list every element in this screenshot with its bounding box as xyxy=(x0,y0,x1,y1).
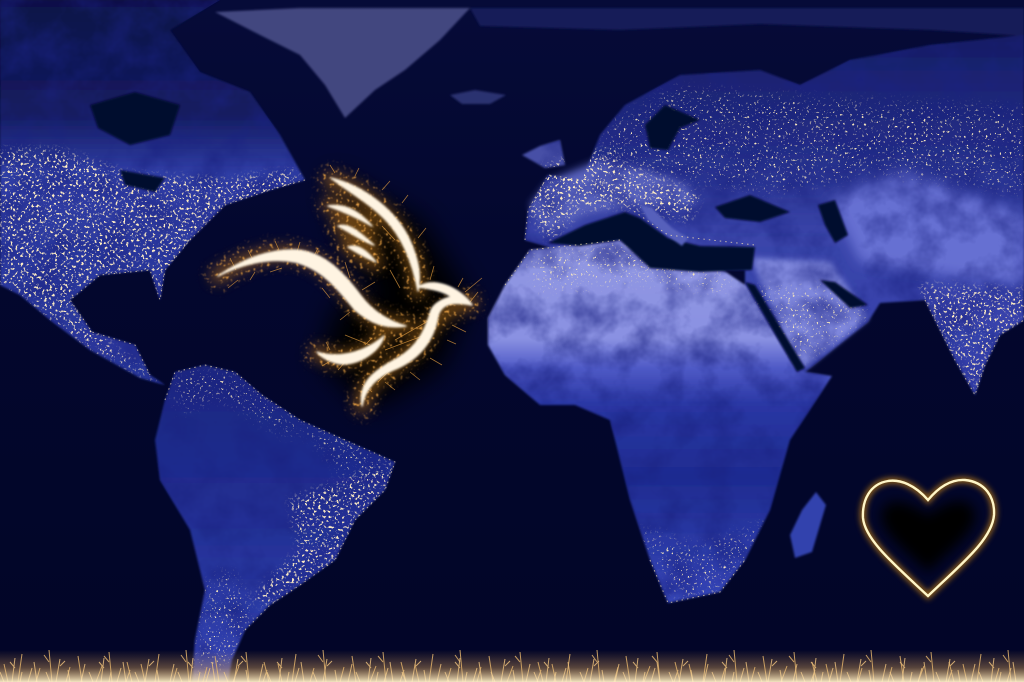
dove white shapes xyxy=(218,178,472,406)
heart glow xyxy=(863,480,994,596)
heart dark interior xyxy=(881,501,975,572)
island: Greenland xyxy=(215,8,470,118)
dove upper wing xyxy=(331,178,419,291)
sea: Great Lakes xyxy=(120,170,165,192)
heart outline xyxy=(863,480,994,596)
spark stalks, second layer xyxy=(0,642,1024,682)
sea: Mediterranean xyxy=(548,212,755,272)
sea: Red Sea xyxy=(745,282,805,372)
spark glow band xyxy=(0,650,1024,682)
inland seas xyxy=(90,92,868,372)
continent: North America xyxy=(0,0,305,385)
peninsula: Italy xyxy=(640,205,688,246)
continent: South America xyxy=(155,365,395,682)
dove spark specks xyxy=(200,160,489,425)
dove tail xyxy=(317,336,384,364)
dove amber glow xyxy=(218,180,470,405)
island: Madagascar xyxy=(790,492,826,558)
dove lower wing and back xyxy=(218,250,406,327)
icon: sparkler dove xyxy=(198,160,489,425)
dove body and head xyxy=(361,283,472,406)
dove sparks xyxy=(228,165,482,392)
region: Arabia highlight xyxy=(752,258,868,368)
continent: Africa xyxy=(488,240,832,603)
spark stalks xyxy=(0,642,1024,682)
bottom sparks xyxy=(0,642,1024,682)
region: central Asia highlight xyxy=(830,172,1024,285)
sea: Caspian xyxy=(818,200,848,243)
icon: sparkler heart xyxy=(863,480,994,596)
city lights: coastlines xyxy=(70,175,1024,630)
island: Iceland xyxy=(450,90,506,104)
continent: Eurasia xyxy=(525,35,1024,395)
arctic strip xyxy=(470,8,1024,36)
island: Britain xyxy=(522,140,565,168)
sea: Persian Gulf xyxy=(820,280,868,308)
city lights: dense areas xyxy=(0,144,1024,610)
sea: Black Sea xyxy=(715,195,790,222)
sea: Hudson Bay xyxy=(90,92,180,145)
region: Europe highlight xyxy=(530,160,700,235)
dove feathers xyxy=(328,205,376,262)
sea: Baltic xyxy=(645,105,700,150)
dove dark halo xyxy=(320,175,470,410)
city lights: sparse areas xyxy=(169,82,1024,678)
